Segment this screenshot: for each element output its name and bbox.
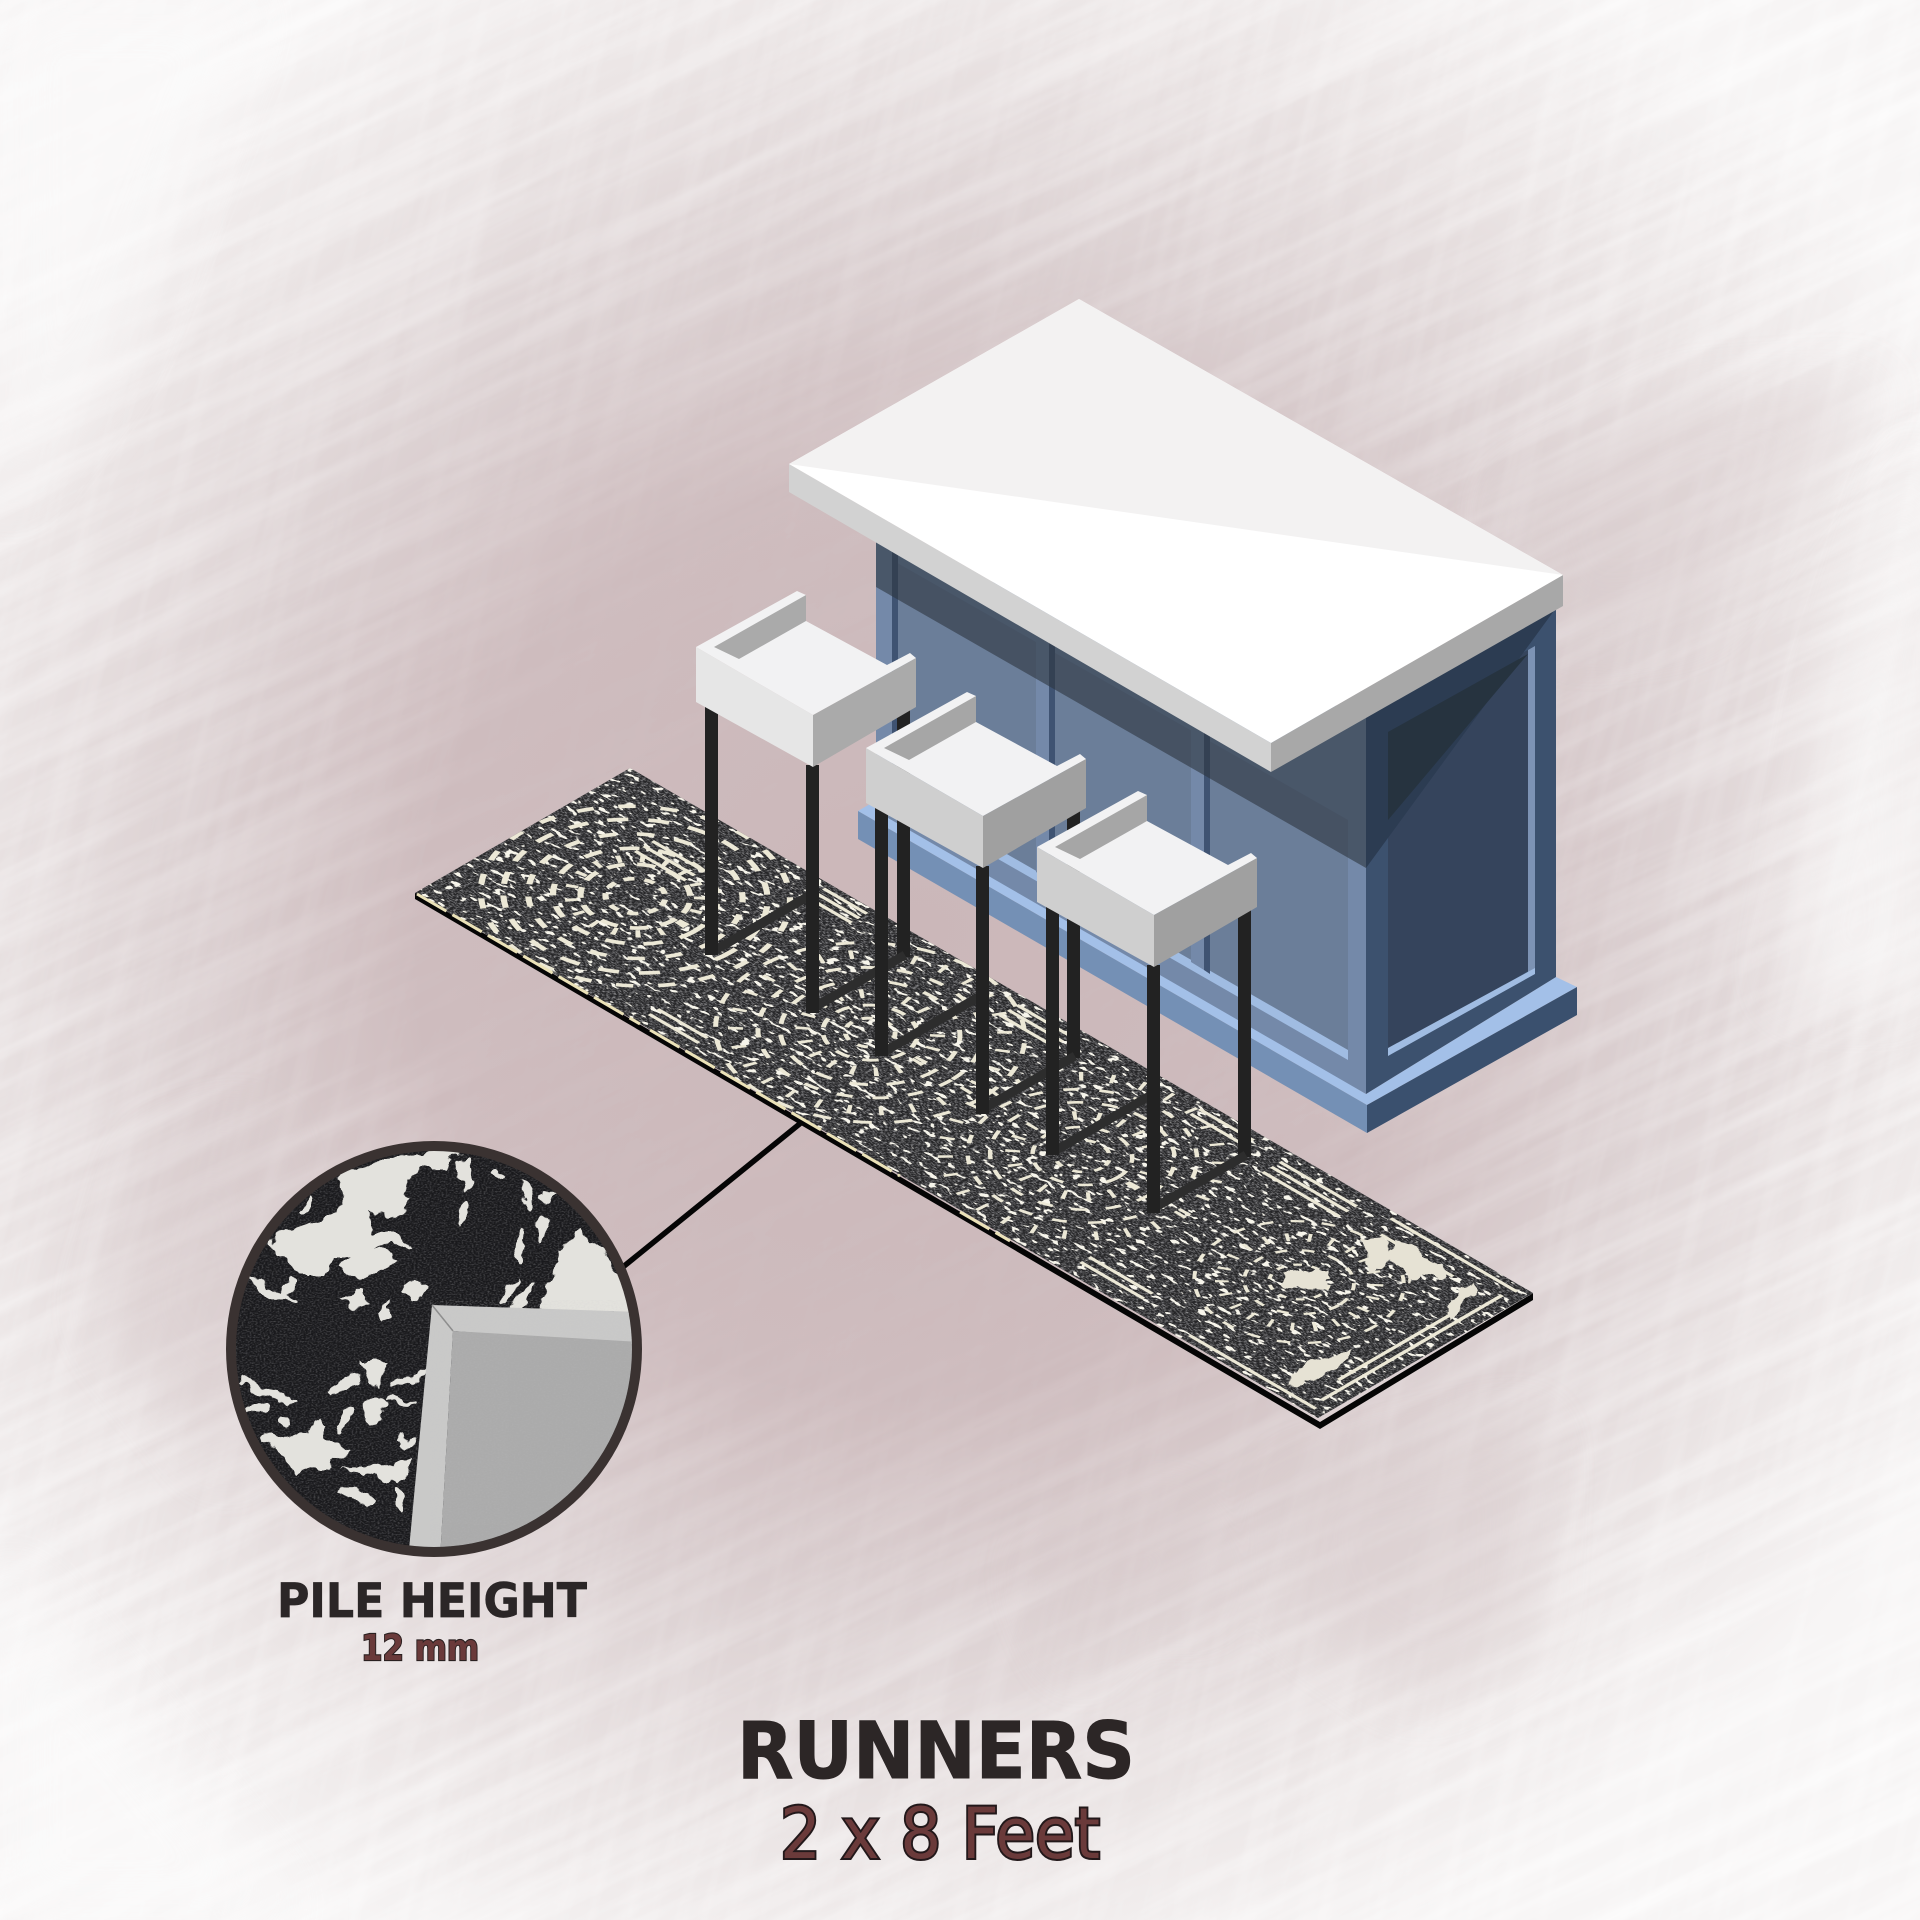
connector line from rug to detail circle bbox=[618, 1122, 802, 1271]
pile height value: 12 mm bbox=[361, 1628, 479, 1669]
bar stool 2 bbox=[866, 692, 1086, 1114]
rug end motif blobs bbox=[1279, 1235, 1475, 1387]
medallion left bbox=[478, 804, 794, 988]
cream pile blobs bbox=[230, 1154, 640, 1513]
stool 2 legs bbox=[875, 801, 1080, 1114]
bar stool 1 bbox=[696, 591, 916, 1013]
stool 1 seat bbox=[696, 591, 916, 767]
island side face bbox=[1366, 606, 1556, 1094]
medallion right bbox=[1192, 1220, 1406, 1344]
stool 3 legs bbox=[1046, 900, 1251, 1213]
kitchen island bbox=[789, 299, 1577, 1133]
detail circle: pile close-up bbox=[226, 1141, 642, 1560]
subtitle: size: 2 x 8 Feet bbox=[780, 1793, 1100, 1875]
rug backing corner: grey canvas bbox=[440, 1331, 640, 1560]
rug stripe borders bbox=[496, 815, 1517, 1409]
rug cream edge line bbox=[417, 894, 1010, 1241]
island front face bbox=[876, 540, 1366, 1094]
rug edge thickness bbox=[415, 893, 1533, 1429]
bar stool 3 bbox=[1037, 791, 1257, 1213]
medallion middle right bbox=[938, 1072, 1226, 1240]
stool 2 seat bbox=[866, 692, 1086, 868]
side shadow bbox=[1366, 608, 1556, 868]
pile height label: PILE HEIGHT bbox=[277, 1574, 587, 1629]
pile height label bbox=[277, 1574, 587, 1669]
rug backing corner: border strip bbox=[408, 1305, 640, 1560]
stool 1 legs bbox=[705, 700, 910, 1013]
medallion middle left bbox=[713, 941, 1027, 1124]
rug surface pattern bbox=[415, 768, 1533, 1418]
island front shadow bbox=[876, 540, 1366, 868]
rug: black and cream runner bbox=[415, 768, 1533, 1429]
island base bbox=[858, 801, 1577, 1133]
stool 3 seat bbox=[1037, 791, 1257, 967]
title: runners: RUNNERS bbox=[737, 1707, 1135, 1797]
island countertop bbox=[789, 299, 1563, 772]
